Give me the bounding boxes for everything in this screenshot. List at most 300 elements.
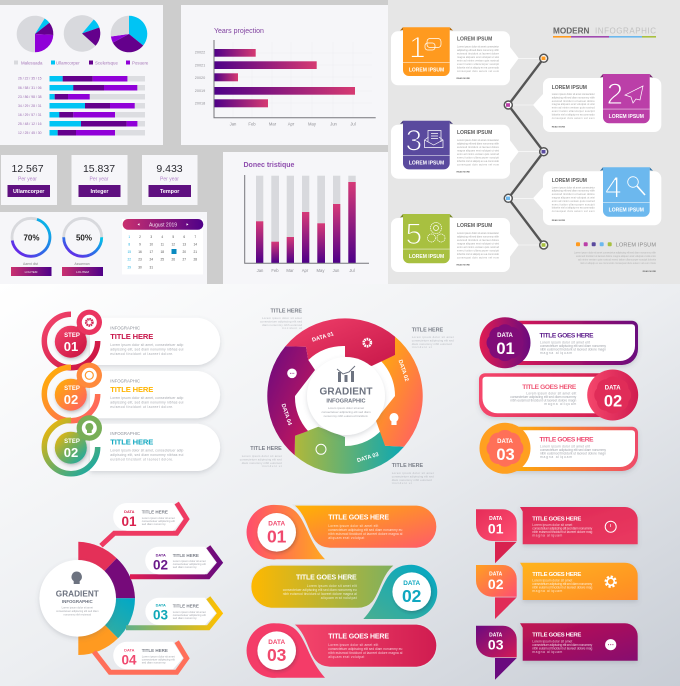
- progress ring 70%: [11, 218, 52, 276]
- horizontal bar chart: May: [308, 122, 317, 126]
- card 1: Lorem ipsum dolor sit amet consectetur: [457, 44, 499, 48]
- vertical bar chart: Apr: [302, 268, 309, 273]
- callout: title here bottom left: Lorem ipsum dolor sit amet: [242, 454, 282, 458]
- tag row 02: nibh euismod tincidunt ut laoreet dolore mag: [532, 586, 592, 590]
- progress ring 50%: [62, 218, 103, 276]
- horizontal bar chart: Jun: [330, 122, 338, 126]
- banner data 03: 03: [496, 446, 515, 464]
- callout: title here bottom right: TITLE HERE: [392, 463, 424, 469]
- banner data 02: [479, 370, 638, 420]
- callout: title here top left: Lorem ipsum dolor sit amet: [262, 316, 302, 320]
- step 1: euismod tincidunt ut laoreet dolore.: [110, 352, 173, 356]
- card 1: 1: [409, 32, 426, 64]
- banner data 03: TITLE GOES HERE: [540, 436, 594, 444]
- icon: chat: [287, 368, 297, 378]
- tag row 01: [476, 507, 638, 563]
- progress ring 50%: LOLITEM: [76, 270, 89, 274]
- card 1: READ MORE: [456, 77, 470, 80]
- card 4: consequat duis autem vel eum: [552, 209, 595, 213]
- card 5: enim ad minim veniam quis nostrud: [457, 245, 500, 249]
- banner data 01: [480, 317, 638, 368]
- callout: title here bottom left: tincidunt ut: [262, 464, 282, 468]
- panel: gradient semicircle with data tabs: [39, 503, 220, 672]
- pie legend: Scelerisque: [95, 60, 118, 66]
- stat card: ullamcorper: [1, 155, 57, 205]
- card 3: adipiscing elit sed diam nonummy nibh: [457, 141, 500, 145]
- banner data 02: nibh euismod tincidunt ut laoreet dolore magn: [510, 398, 576, 402]
- horizontal bar chart: Jul: [350, 122, 356, 126]
- centre label: INFOGRAPHIC: [326, 398, 366, 404]
- legend with colour dots: ad minim veniam quis nostrud exerci tation ullamcorper suscipit lobortis: [578, 258, 657, 262]
- stacked bar chart: [18, 76, 145, 136]
- centre label: [307, 357, 385, 435]
- segment: data 01: [285, 318, 395, 366]
- stacked bar chart: 12 / 25 / 45 / 30: [18, 131, 42, 135]
- stat card: tempor: [142, 155, 198, 205]
- step 2: adipiscing elit, sed diam nonummy nibhas eui: [110, 400, 184, 404]
- tab 03: Lorem ipsum dolor sit amet: [173, 610, 206, 614]
- horizontal bar chart: Jan: [230, 122, 237, 126]
- step 2: 02: [64, 392, 78, 407]
- banner data 02: magna aliquam: [544, 402, 577, 406]
- card 5: consequat duis autem vel eum: [457, 256, 499, 260]
- icon: magnifier: [628, 177, 645, 195]
- capsule 02: [251, 565, 437, 619]
- horizontal bar chart: 20022: [195, 50, 205, 54]
- pie legend: Ullamcorper: [56, 60, 80, 66]
- callout: title here top left: consectetuer adipiscing elit sed: [260, 320, 302, 324]
- card 3: Lorem ipsum dolor sit amet consectetur: [457, 138, 499, 142]
- callout: title here bottom right: [392, 463, 434, 485]
- card 2: 2: [606, 78, 623, 111]
- step 2: euismod tincidunt ut laoreet dolore.: [110, 405, 173, 409]
- card 1: [391, 27, 519, 85]
- connector tab 01: [101, 503, 187, 546]
- card 3: LOREM IPSUM: [409, 160, 444, 166]
- stat card: integer: 15.837: [83, 163, 115, 175]
- card 4: READ MORE: [552, 219, 566, 222]
- calendar: 1: [128, 235, 130, 239]
- tag row 03: consectetuer adipiscing elit sed diam nonummy: [532, 643, 593, 647]
- tag row 02: 02: [488, 576, 504, 592]
- card 1: LOREM IPSUM: [409, 68, 444, 74]
- segment labels: [280, 331, 409, 464]
- tag row 01: consectetuer adipiscing elit sed diam nonummy: [532, 526, 593, 530]
- pie legend: Posuere: [132, 60, 149, 66]
- connector tab 03: [126, 598, 220, 628]
- card 5: [391, 214, 519, 272]
- tab 01: Lorem ipsum dolor sit amet: [142, 516, 175, 520]
- icon: gear: [606, 577, 615, 586]
- banner data 01: Lorem ipsum dolor sit amet elit: [540, 340, 590, 344]
- calendar: 30: [138, 265, 142, 269]
- banner data 01: consectetuer adipiscing elit sed diam nonummy: [540, 344, 606, 348]
- capsule 01: TITLE GOES HERE: [328, 514, 389, 522]
- card 5: LOREM IPSUM: [457, 223, 492, 229]
- calendar: 18: [161, 250, 164, 254]
- banner data 02: Lorem ipsum dolor sit amet elit: [526, 392, 576, 396]
- panel: progress rings and calendar: [0, 212, 207, 284]
- tab 01: consectetuer adipiscing elit: [142, 519, 175, 523]
- centre label: GRADIENT: [320, 386, 372, 398]
- calendar: 5: [172, 235, 174, 239]
- callout: title here top right: consectetuer adipiscing elit sed: [412, 338, 454, 342]
- tag row 03: magna aliquam: [532, 650, 563, 654]
- tag row 02: magna aliquam: [532, 589, 563, 593]
- banner data 02: consectetuer adipiscing elit sed diam nonummy: [510, 395, 577, 399]
- vertical bar chart: Jun: [333, 268, 340, 273]
- capsule 03: nibh euismod tincidunt ut laoreet dolore magna al: [328, 651, 403, 655]
- calendar: 14: [194, 242, 197, 246]
- capsule 02: consectetuer adipiscing elit sed diam nonummy eu: [283, 588, 357, 592]
- vertical bar chart: Mar: [286, 268, 294, 273]
- card 5: Lorem ipsum dolor sit amet consectetur: [457, 231, 499, 235]
- horizontal bar chart: 20021: [195, 64, 205, 68]
- horizontal bar chart: Feb: [248, 122, 256, 126]
- centre circle label: GRADIENT: [56, 589, 99, 598]
- calendar: 20: [183, 250, 186, 254]
- panel: circular gradient infographic: [240, 308, 454, 485]
- calendar: 21: [194, 250, 197, 254]
- tab 04: TITLE HERE: [142, 648, 168, 653]
- legend with colour dots: [574, 242, 657, 273]
- tab 01: DATA: [124, 509, 135, 514]
- step 3: STEP: [64, 439, 80, 445]
- icon: rising chart: [337, 366, 355, 382]
- stacked bar chart: 26 / 22 / 35 / 15: [18, 76, 42, 80]
- connector tab 04: [94, 642, 187, 672]
- card 3: magna aliquam erat volutpat ut wisi: [457, 148, 499, 152]
- centre circle label: consectetuer adipiscing elit sed diam: [56, 609, 98, 613]
- card 5: magna aliquam erat volutpat ut wisi: [457, 242, 499, 246]
- panel: pie charts and stacked bars: [0, 5, 163, 145]
- pie chart 1: [17, 16, 53, 52]
- card 4: LOREM IPSUM: [609, 208, 644, 214]
- tab 02: TITLE HERE: [173, 553, 199, 558]
- pie legend: [14, 60, 149, 66]
- tab 04: DATA: [124, 648, 135, 652]
- panel: data banners top right: [479, 317, 638, 474]
- panel: capsule banners: [247, 505, 437, 678]
- timeline connector: [508, 58, 544, 245]
- vertical bar chart: Jul: [349, 268, 355, 273]
- icon: chat bubbles: [425, 38, 441, 50]
- centre label: Lorem ipsum dolor sit amet: [328, 406, 364, 410]
- calendar: 9: [139, 242, 141, 246]
- icon: clock: [605, 521, 616, 532]
- card 4: lobortis nisl ut aliquip ex ea commodo: [552, 206, 595, 210]
- card 1: enim ad minim veniam quis nostrud: [457, 58, 500, 62]
- stat card: ullamcorper: Per year: [18, 176, 37, 182]
- tab 02: consectetuer adipiscing elit: [173, 562, 206, 566]
- horizontal bar chart: 20018: [195, 102, 205, 106]
- card 3: lobortis nisl ut aliquip ex ea commodo: [457, 159, 500, 163]
- calendar: 28: [194, 258, 197, 262]
- card 3: exerci tation ullamcorper suscipit: [457, 155, 499, 159]
- horizontal bar chart: Apr: [288, 122, 295, 126]
- calendar: 7: [194, 235, 196, 239]
- tab 01: TITLE HERE: [142, 510, 168, 514]
- capsule 03: TITLE GOES HERE: [328, 634, 389, 640]
- capsule 01: consectetuer adipiscing elit sed diam nonummy eu: [328, 528, 402, 532]
- calendar: 17: [150, 250, 153, 254]
- capsule 02: DATA: [403, 580, 420, 587]
- calendar: 12: [172, 242, 175, 246]
- card 4: adipiscing elit sed diam nonummy nibh: [552, 189, 595, 193]
- segment labels: DATA 02: [397, 359, 409, 382]
- tab 04: [113, 642, 183, 669]
- panel: modern infographic timeline: [388, 0, 680, 284]
- tag row 01: 01: [488, 520, 504, 536]
- card 2: LOREM IPSUM: [609, 114, 644, 120]
- segment labels: DATA 01: [311, 331, 335, 344]
- horizontal bar chart: 20020: [195, 76, 205, 80]
- legend with colour dots: nisl ut aliquip ex ea commodo consequat duis autem vel eum iriure: [580, 261, 657, 265]
- card 3: 3: [406, 124, 422, 158]
- callout: title here top right: diam nonummy nibh euismod: [412, 342, 452, 346]
- segment: data 03: [295, 426, 404, 474]
- pie legend: Malesuada: [21, 60, 43, 66]
- card 5: lobortis nisl ut aliquip ex ea commodo: [457, 252, 500, 256]
- icon: bulb: [390, 413, 398, 425]
- banner data 02: 02: [604, 392, 622, 410]
- banner data 03: magna aliquam: [540, 455, 572, 459]
- icon: paper plane: [625, 86, 643, 103]
- card 4: magna aliquam erat volutpat ut wisi: [552, 196, 595, 200]
- calendar: 8: [128, 242, 130, 246]
- calendar: 15: [128, 250, 131, 254]
- callout: title here top left: [260, 308, 302, 330]
- calendar: 19: [172, 250, 176, 254]
- stacked bar chart: 06 / 58 / 31 / 06: [18, 86, 42, 90]
- icon: gears: [428, 222, 445, 242]
- tab 03: 03: [153, 608, 168, 622]
- tab 03: TITLE HERE: [173, 604, 199, 608]
- calendar: 10: [150, 242, 153, 246]
- callout: title here bottom left: consectetuer adipiscing elit sed: [240, 458, 282, 462]
- card 5: euismod tincidunt ut laoreet dolore: [457, 238, 500, 242]
- card 5: adipiscing elit sed diam nonummy nibh: [457, 235, 500, 239]
- centre circle label: [39, 560, 116, 637]
- tab 04: sed diam nonummy: [142, 660, 166, 664]
- capsule 03: 03: [267, 645, 287, 665]
- step 3: INFOGRAPHIC: [110, 431, 140, 436]
- stat card: tempor: Per year: [160, 176, 179, 182]
- tag row 02: TITLE GOES HERE: [532, 572, 581, 578]
- stat card: tempor: Tempor: [160, 189, 180, 195]
- capsule 03: Lorem ipsum dolor sit amet elit: [328, 643, 378, 647]
- tag row 02: [476, 563, 638, 619]
- tab 01: sed diam nonummy: [142, 522, 166, 526]
- step 3: 02: [64, 445, 78, 460]
- capsule 01: nibh euismod tincidunt ut laoreet dolore magna al: [328, 532, 403, 536]
- calendar: 13: [183, 242, 186, 246]
- centre circle label: INFOGRAPHIC: [62, 599, 93, 604]
- callout: title here bottom left: [240, 446, 282, 468]
- banner data 01: 01: [496, 340, 515, 358]
- card 1: exerci tation ullamcorper suscipit: [457, 62, 499, 66]
- card 2: LOREM IPSUM: [552, 85, 587, 91]
- callout: title here top right: [412, 328, 454, 349]
- icon: envelope: [424, 130, 443, 148]
- panel: step list: [44, 310, 220, 474]
- card 5: exerci tation ullamcorper suscipit: [457, 249, 499, 253]
- card 5: READ MORE: [456, 264, 470, 267]
- banner data 02: DATA: [605, 386, 621, 392]
- icon: clock: [316, 444, 326, 454]
- icon: gear: [86, 319, 93, 325]
- step 2: INFOGRAPHIC: [110, 378, 140, 384]
- step 1: STEP: [64, 333, 80, 339]
- step 2: Lorem ipsum dolor sit amet, consectetuer adip: [110, 396, 183, 400]
- card 4: euismod tincidunt ut laoreet dolore: [552, 192, 595, 196]
- heading: modern infographic: [553, 26, 656, 38]
- card 1: euismod tincidunt ut laoreet dolore: [457, 52, 500, 56]
- calendar: 6: [183, 235, 185, 239]
- callout: title here top left: diam nonummy nibh euismod: [262, 323, 302, 327]
- segment: data 02: [376, 337, 423, 447]
- calendar: August 2019: [149, 222, 177, 228]
- card 4: [533, 167, 661, 225]
- tag row 02: consectetuer adipiscing elit sed diam nonummy: [532, 582, 593, 586]
- step 1: 01: [64, 339, 78, 354]
- callout: title here top left: TITLE HERE: [271, 308, 302, 314]
- card 5: 5: [406, 218, 422, 251]
- card 2: consequat duis autem vel eum: [552, 116, 595, 120]
- legend with colour dots: LOREM IPSUM: [616, 243, 656, 249]
- tag row 03: 03: [488, 637, 504, 653]
- tab 04: 04: [121, 652, 137, 668]
- icon: bulb: [85, 423, 93, 433]
- centre circle label: nonummy nibh euismod: [64, 612, 92, 616]
- step 1: adipiscing elit, sed diam nonummy nibhas eui: [110, 348, 184, 352]
- capsule 02: 02: [402, 586, 422, 606]
- top section background: [0, 0, 388, 284]
- callout: title here top right: TITLE HERE: [412, 328, 444, 334]
- tab 01: [113, 503, 183, 531]
- capsule 02: Lorem ipsum dolor sit amet elit: [307, 584, 357, 588]
- banner data 01: DATA: [497, 333, 514, 339]
- tag row 02: Lorem ipsum dolor sit amet: [532, 579, 572, 583]
- progress ring 50%: 50%: [76, 234, 92, 242]
- callout: title here top right: tincidunt ut: [412, 345, 432, 349]
- calendar: 2: [139, 235, 141, 239]
- calendar: 23: [138, 258, 142, 262]
- capsule 01: 01: [267, 526, 287, 546]
- banner data 03: nibh euismod tincidunt ut laoreet dolore magn: [540, 452, 606, 456]
- tab 02: 02: [153, 558, 168, 572]
- semicircle wedges: [78, 542, 135, 655]
- callout: title here bottom right: consectetuer adipiscing elit sed: [392, 474, 434, 478]
- step 2: STEP: [64, 386, 80, 392]
- vertical bar chart: Jan: [257, 268, 264, 273]
- callout: title here top left: tincidunt ut: [282, 326, 302, 330]
- step 1: INFOGRAPHIC: [110, 326, 140, 330]
- calendar: 25: [161, 258, 164, 262]
- card 1: consequat duis autem vel eum: [457, 69, 499, 73]
- step 3: adipiscing elit, sed diam nonummy nibhas eui: [110, 453, 184, 457]
- capsule 02: aliquam erat volutpat: [321, 596, 357, 600]
- step 1: [44, 310, 220, 368]
- tag row 01: nibh euismod tincidunt ut laoreet dolore mag: [532, 530, 592, 534]
- card 2: READ MORE: [552, 126, 566, 128]
- card 4: exerci tation ullamcorper suscipit: [552, 202, 595, 206]
- card 2: enim ad minim veniam quis nostrud: [552, 106, 595, 110]
- connector tab 02: [130, 547, 220, 577]
- tab 04: Lorem ipsum dolor sit amet: [142, 654, 175, 658]
- card 4: Lorem ipsum dolor sit amet consectetur: [552, 185, 595, 189]
- banner data 01: magna aliquam: [540, 351, 572, 355]
- stacked bar chart: 23 / 86 / 98 / 38: [18, 95, 42, 99]
- stat card: ullamcorper: Ullamcorper: [13, 189, 45, 195]
- calendar: 16: [138, 250, 142, 254]
- card 2: euismod tincidunt ut laoreet dolore: [552, 99, 595, 103]
- tag row 03: DATA: [489, 632, 503, 638]
- card 3: LOREM IPSUM: [457, 130, 492, 136]
- card 3: enim ad minim veniam quis nostrud: [457, 152, 500, 156]
- stat card: integer: Per year: [90, 176, 109, 182]
- centre label: consectetuer adipiscing elit sed diam: [321, 410, 371, 414]
- tab 02: DATA: [156, 552, 166, 558]
- capsule 03: [247, 623, 437, 678]
- tag row 02: DATA: [489, 572, 503, 578]
- calendar: 24: [150, 258, 153, 262]
- tag row 01: Lorem ipsum dolor sit amet: [532, 523, 572, 527]
- card 2: magna aliquam erat volutpat ut wisi: [552, 102, 595, 106]
- capsule 03: DATA: [268, 639, 285, 646]
- pie chart 3: [111, 16, 147, 52]
- banner data 03: Lorem ipsum dolor sit amet elit: [540, 444, 590, 448]
- pie chart 2: [64, 15, 100, 52]
- panel: tag banners: [476, 507, 638, 680]
- card 1: LOREM IPSUM: [457, 36, 492, 42]
- banner data 03: [480, 423, 638, 474]
- banner data 01: nibh euismod tincidunt ut laoreet dolore magn: [540, 348, 606, 352]
- timeline nodes: [504, 54, 548, 249]
- callout: title here bottom left: diam nonummy nibh euismod: [242, 461, 282, 465]
- calendar: 3: [150, 235, 152, 239]
- card 3: euismod tincidunt ut laoreet dolore: [457, 145, 500, 149]
- banner data 01: TITLE GOES HERE: [540, 332, 594, 340]
- capsule 01: [247, 505, 437, 559]
- tab 03: [145, 598, 216, 625]
- calendar: 29: [128, 265, 131, 269]
- step 3: TITLE HERE: [110, 438, 153, 446]
- horizontal bar chart: Mar: [269, 122, 277, 126]
- heading: modern infographic: INFOGRAPHIC: [595, 26, 656, 36]
- centre circle label: Lorem ipsum dolor sit amet: [62, 606, 93, 610]
- stacked bar chart: 25 / 48 / 12 / 16: [18, 122, 42, 126]
- progress ring 70%: Aaent dist: [23, 262, 38, 266]
- tab 02: [145, 547, 216, 574]
- tag row 01: TITLE GOES HERE: [532, 516, 581, 522]
- step 1: Lorem ipsum dolor sit amet, consectetuer adip: [110, 343, 183, 347]
- card 2: [533, 74, 661, 132]
- progress ring 70%: 70%: [23, 234, 40, 242]
- card 4: LOREM IPSUM: [552, 178, 587, 184]
- card 1: lobortis nisl ut aliquip ex ea commodo: [457, 66, 500, 70]
- calendar: [122, 219, 203, 274]
- calendar: 4: [161, 235, 163, 239]
- icon: gear: [364, 339, 371, 346]
- bottom section background: [0, 284, 680, 686]
- calendar: 22: [128, 258, 131, 262]
- callout: title here bottom right: tincidunt ut: [392, 481, 412, 485]
- capsule 03: consectetuer adipiscing elit sed diam nonummy eu: [328, 647, 402, 651]
- heading: donec tristique: Donec tristique: [244, 162, 295, 169]
- tab 03: sed diam nonummy: [173, 616, 197, 620]
- calendar: 26: [172, 258, 175, 262]
